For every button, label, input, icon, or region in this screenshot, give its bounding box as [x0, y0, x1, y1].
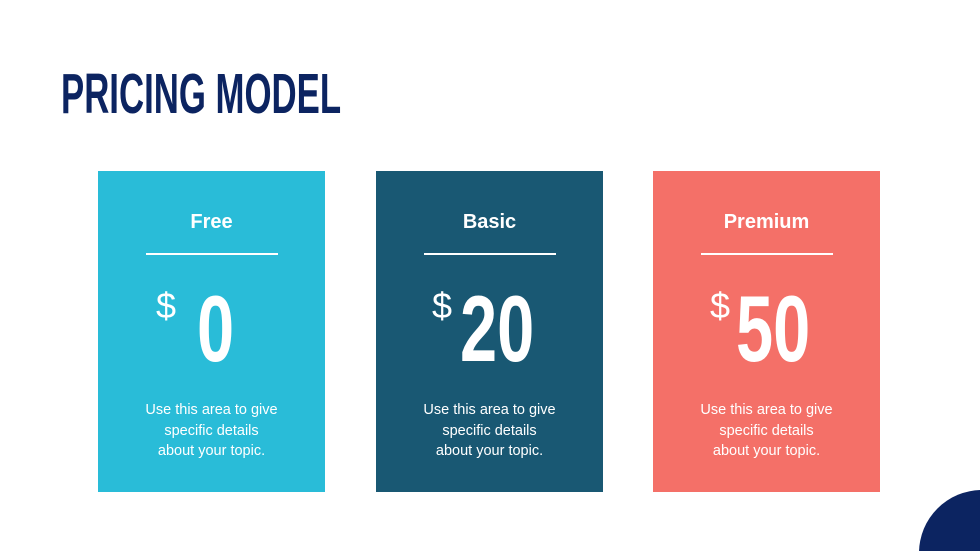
text: free: specific details: [164, 422, 259, 438]
heading: free: Free: [190, 211, 233, 233]
text: basic: Use this area to give: [423, 402, 556, 418]
heading: basic: Basic: [463, 211, 516, 233]
price: free: [156, 276, 234, 381]
text: free: [145, 402, 278, 459]
title: PRICING MODEL: [61, 62, 341, 126]
text: premium: specific details: [719, 422, 814, 438]
price: premium: 50: [736, 276, 810, 381]
panel: free: [98, 171, 325, 492]
text: basic: specific details: [442, 422, 537, 438]
text: basic: about your topic.: [436, 443, 543, 459]
text: free: about your topic.: [158, 443, 265, 459]
heading: premium: Premium: [724, 211, 809, 233]
text: basic: [423, 402, 556, 459]
price: basic: $: [432, 285, 452, 326]
text: free: Use this area to give: [145, 402, 278, 418]
decorative circle: [919, 490, 980, 551]
panel: basic: [376, 171, 603, 492]
text: premium: [700, 402, 833, 459]
price: free: 0: [197, 276, 234, 381]
text: premium: about your topic.: [713, 443, 820, 459]
text: premium: Use this area to give: [700, 402, 833, 418]
price: premium: $: [710, 285, 730, 326]
price: free: $: [156, 285, 176, 326]
panel: premium: [653, 171, 880, 492]
price: basic: 20: [460, 276, 534, 381]
